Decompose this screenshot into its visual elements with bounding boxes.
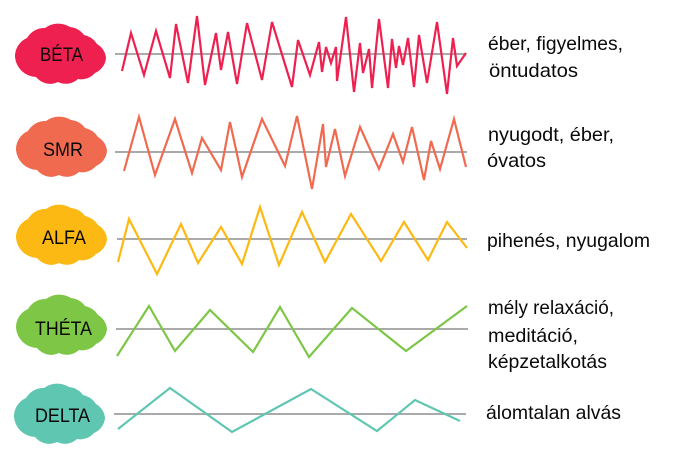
wave: BÉTA (122, 16, 466, 94)
description: THÉTA: meditáció, (488, 325, 578, 347)
description: SMR: nyugodt, éber, (488, 124, 614, 146)
baseline: SMR (115, 151, 467, 153)
description: ALFA: pihenés, nyugalom (487, 230, 650, 252)
label: THÉTA: THÉTA (35, 317, 92, 340)
baseline: ALFA (117, 238, 467, 240)
description: DELTA: álomtalan alvás (486, 402, 621, 424)
wave: SMR (124, 116, 466, 189)
icon: THÉTA cloud (16, 295, 107, 355)
icon: DELTA cloud (14, 384, 105, 444)
description: THÉTA (488, 297, 614, 373)
description: THÉTA: képzetalkotás (488, 351, 607, 373)
baseline: DELTA (114, 413, 466, 415)
panel: SMR row (16, 116, 614, 189)
baseline: BÉTA (115, 53, 466, 55)
description: SMR (487, 124, 614, 172)
label: ALFA: ALFA (42, 227, 86, 249)
description: BÉTA: éber, figyelmes, (488, 33, 623, 55)
label: DELTA: DELTA (35, 405, 90, 427)
description: BÉTA: öntudatos (489, 60, 578, 82)
description: THÉTA: mély relaxáció, (488, 297, 614, 319)
description: SMR: óvatos (487, 150, 546, 172)
icon: SMR cloud (16, 117, 107, 177)
panel: ALFA row (16, 205, 650, 274)
wave: ALFA (118, 207, 467, 274)
label: SMR: SMR (43, 139, 83, 161)
panel: DELTA row (14, 384, 621, 444)
baseline: THÉTA (116, 328, 468, 330)
icon: BÉTA cloud (15, 24, 106, 84)
panel: THÉTA row (16, 295, 614, 373)
description: BÉTA (488, 33, 623, 82)
wave: DELTA (118, 388, 460, 432)
wave: THÉTA (117, 306, 467, 357)
icon: ALFA cloud (16, 205, 107, 265)
panel: BÉTA row (15, 16, 623, 94)
label: BÉTA: BÉTA (40, 43, 83, 66)
